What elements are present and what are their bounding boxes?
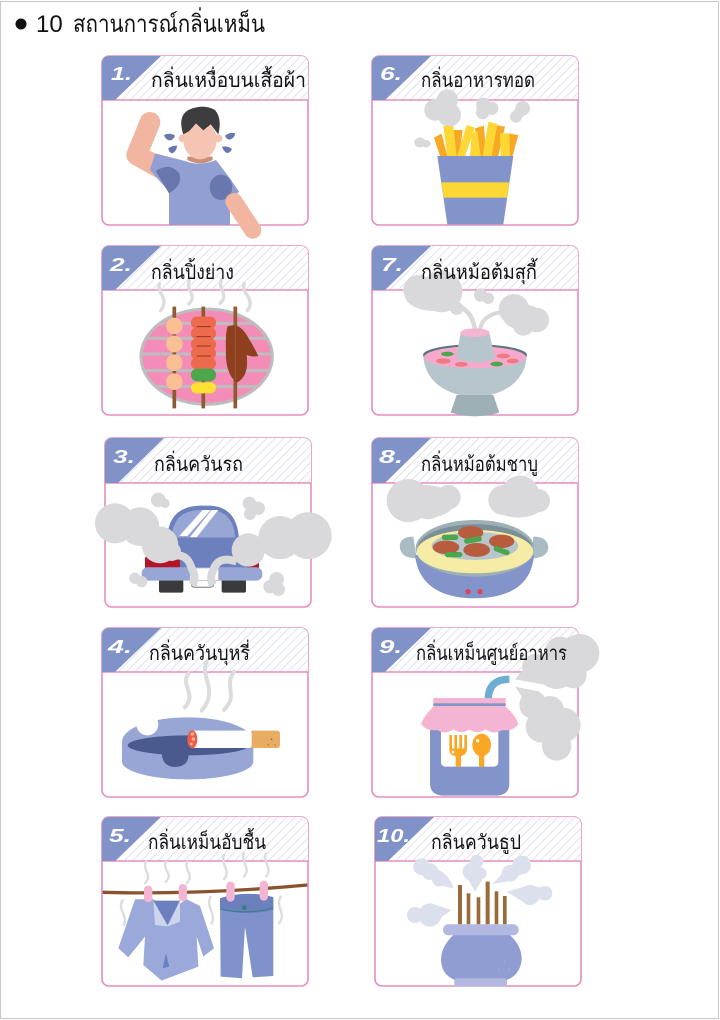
- panel: 8 shabu pot smell: กลิ่นหม้อต้มชาบู: [421, 450, 538, 477]
- panel: 9 food court smell: กลิ่นเหม็นศูนย์อาหาร: [416, 639, 567, 666]
- panel: 4 cigarette smoke smell: [102, 628, 308, 797]
- panel: 10 incense smoke smell: [375, 817, 581, 987]
- panel: 4 cigarette smoke smell: กลิ่นควันบุหรี่: [149, 639, 250, 666]
- panel: 3 car exhaust smell: 3.: [113, 447, 135, 467]
- panel: 10 incense smoke smell: 10.: [377, 826, 410, 846]
- panel: 3 car exhaust smell: [95, 438, 332, 607]
- panel: 8 shabu pot smell: [372, 438, 578, 607]
- panel: 10 incense smoke smell: กลิ่นควันธูป: [431, 828, 521, 855]
- panel: 5 damp musty smell: กลิ่นเหม็นอับชื้น: [148, 828, 266, 854]
- icon: grill with skewers: [141, 279, 272, 408]
- icon: sweating man: [137, 107, 253, 230]
- panel: 6 fried food smell: [372, 56, 578, 225]
- icon: clothes on line: [103, 853, 307, 981]
- title: สถานการณ์กลิ่นเหม็น: [73, 7, 265, 38]
- panel: 9 food court smell: 9.: [379, 637, 402, 657]
- panel: 2 grilling smell: [102, 246, 308, 415]
- panel: 9 food court smell: [372, 628, 599, 797]
- panel: 1 sweat smell on clothes: [102, 56, 308, 230]
- icon: suki hot pot: [403, 271, 549, 416]
- panel: 7 suki pot smell: กลิ่นหม้อต้มสุกี้: [421, 258, 538, 285]
- panel: 3 car exhaust smell: กลิ่นควันรถ: [154, 450, 243, 476]
- panel: 7 suki pot smell: 7.: [381, 255, 403, 275]
- panel: 2 grilling smell: กลิ่นปิ้งย่าง: [151, 258, 234, 284]
- title: [16, 7, 265, 38]
- panel: 2 grilling smell: 2.: [109, 255, 132, 275]
- icon: car with exhaust smoke: [95, 493, 332, 596]
- icon: ashtray and cigarette: [122, 662, 280, 779]
- panel: 6 fried food smell: กลิ่นอาหารทอด: [421, 66, 535, 92]
- icon: food stall with chimney smoke: [421, 634, 599, 796]
- panel: 5 damp musty smell: 5.: [109, 826, 131, 846]
- panel: 1 sweat smell on clothes: กลิ่นเหงื่อบนเสื้อผ้า: [151, 66, 306, 92]
- panel: 5 damp musty smell: [102, 817, 308, 986]
- title: 10: [36, 11, 63, 38]
- panel: 7 suki pot smell: [372, 246, 578, 416]
- icon: french fries: [414, 89, 530, 224]
- panel: 1 sweat smell on clothes: 1.: [111, 64, 132, 84]
- icon: incense burner: [407, 855, 552, 987]
- panel: 6 fried food smell: 6.: [380, 64, 402, 84]
- icon: shabu pot: [387, 476, 550, 598]
- panel: 8 shabu pot smell: 8.: [379, 447, 403, 467]
- panel: 4 cigarette smoke smell: 4.: [106, 637, 132, 657]
